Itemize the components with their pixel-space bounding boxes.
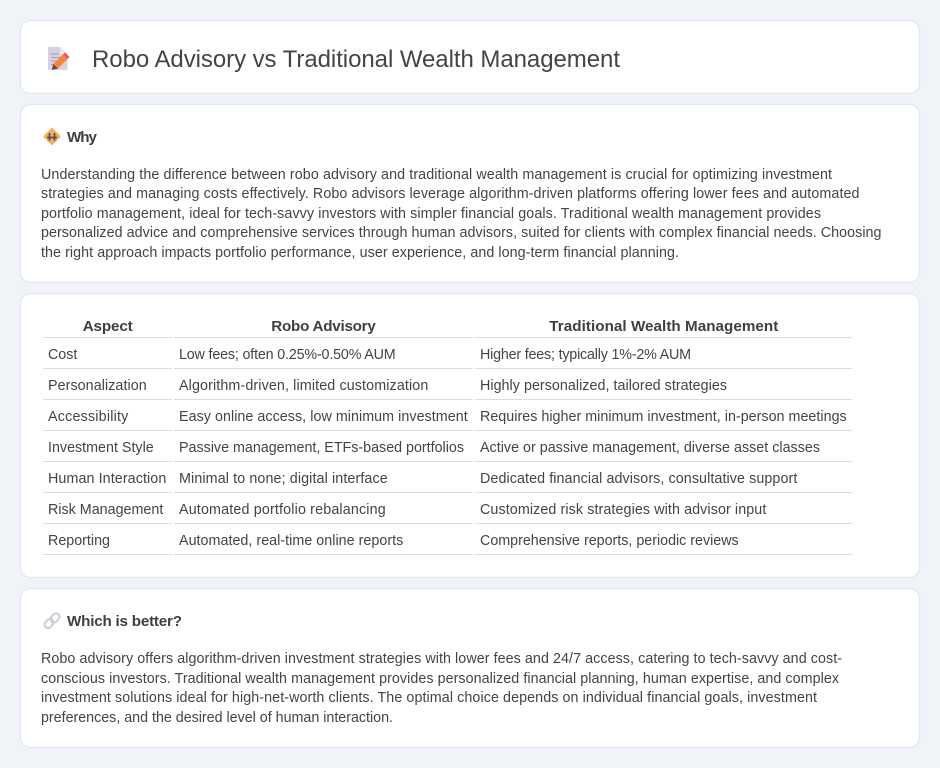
row: human interaction: Human Interaction xyxy=(48,471,166,487)
text block: why paragraph: personalized advice and comprehensive services through human advisors, suited for clients with complex financial needs. Choosing xyxy=(41,225,882,241)
row: cost xyxy=(48,347,691,363)
table header: Robo Advisory xyxy=(271,318,376,335)
table header: Aspect xyxy=(83,318,133,335)
row: accessibility: Requires higher minimum investment, in-person meetings xyxy=(480,409,847,425)
icon: document with pencil xyxy=(48,47,70,70)
panel: comparison table xyxy=(20,294,920,578)
heading: why: Why xyxy=(67,129,98,146)
row: human interaction: Minimal to none; digital interface xyxy=(179,471,388,487)
icon: warning diamond xyxy=(44,128,60,144)
row: cost: Cost xyxy=(48,347,77,363)
row: investment style: Investment Style xyxy=(48,440,154,456)
text block: which is better paragraph: investment solutions ideal for high-net-worth clients. The optimal choice depends on individual financial goals, investment xyxy=(41,690,817,706)
row: investment style: Active or passive management, diverse asset classes xyxy=(480,440,820,456)
row: reporting: Automated, real-time online reports xyxy=(179,533,403,549)
row: personalization: Algorithm-driven, limited customization xyxy=(179,378,428,394)
row: accessibility: Accessibility xyxy=(48,409,129,425)
table header: Traditional Wealth Management xyxy=(549,318,778,335)
row: risk management: Risk Management xyxy=(48,502,163,518)
panel: header xyxy=(20,20,920,94)
row: accessibility xyxy=(48,409,847,425)
row: reporting: Comprehensive reports, periodic reviews xyxy=(480,533,739,549)
text block: why paragraph: strategies and managing costs effectively. Robo advisors leverage algorithm-driven platforms offering lower fees and automated xyxy=(41,186,860,202)
icon: chain link xyxy=(43,612,61,630)
row: human interaction xyxy=(48,471,797,487)
row: investment style: Passive management, ETFs-based portfolios xyxy=(179,440,464,456)
row: risk management: Customized risk strategies with advisor input xyxy=(480,502,766,518)
text block: why paragraph: Understanding the difference between robo advisory and traditional wealth management is crucial for optimizing investment xyxy=(41,167,832,183)
row: accessibility: Easy online access, low minimum investment xyxy=(179,409,468,425)
text block: why paragraph: portfolio management, ideal for tech-savvy investors with simpler financial goals. Traditional wealth management provides xyxy=(41,206,821,222)
row: personalization xyxy=(48,378,727,394)
table header xyxy=(83,318,778,335)
row: risk management: Automated portfolio rebalancing xyxy=(179,502,386,518)
panel: why xyxy=(20,104,920,282)
row: human interaction: Dedicated financial advisors, consultative support xyxy=(480,471,797,487)
row: cost: Higher fees; typically 1%-2% AUM xyxy=(480,347,691,363)
row: investment style xyxy=(48,440,820,456)
text block: which is better paragraph: Robo advisory offers algorithm-driven investment strategies with lower fees and 24/7 access, catering to tech-savvy and cost- xyxy=(41,651,842,667)
title: Robo Advisory vs Traditional Wealth Management xyxy=(92,46,620,73)
panel: which is better xyxy=(20,588,920,748)
row: cost: Low fees; often 0.25%-0.50% AUM xyxy=(179,347,396,363)
text block: which is better paragraph xyxy=(41,651,842,726)
text block: why paragraph xyxy=(41,167,882,261)
row: personalization: Personalization xyxy=(48,378,147,394)
row: reporting xyxy=(48,533,739,549)
text block: which is better paragraph: preferences, and the desired level of human interaction. xyxy=(41,710,393,726)
row: reporting: Reporting xyxy=(48,533,110,549)
text block: why paragraph: the right approach impacts portfolio performance, user experience, and long-term financial planning. xyxy=(41,245,679,261)
heading: which is better: Which is better? xyxy=(67,613,182,630)
text block: which is better paragraph: conscious investors. Traditional wealth management provides personalized financial planning, human expertise, and complex xyxy=(41,671,839,687)
row: personalization: Highly personalized, tailored strategies xyxy=(480,378,727,394)
row: risk management xyxy=(48,502,766,518)
